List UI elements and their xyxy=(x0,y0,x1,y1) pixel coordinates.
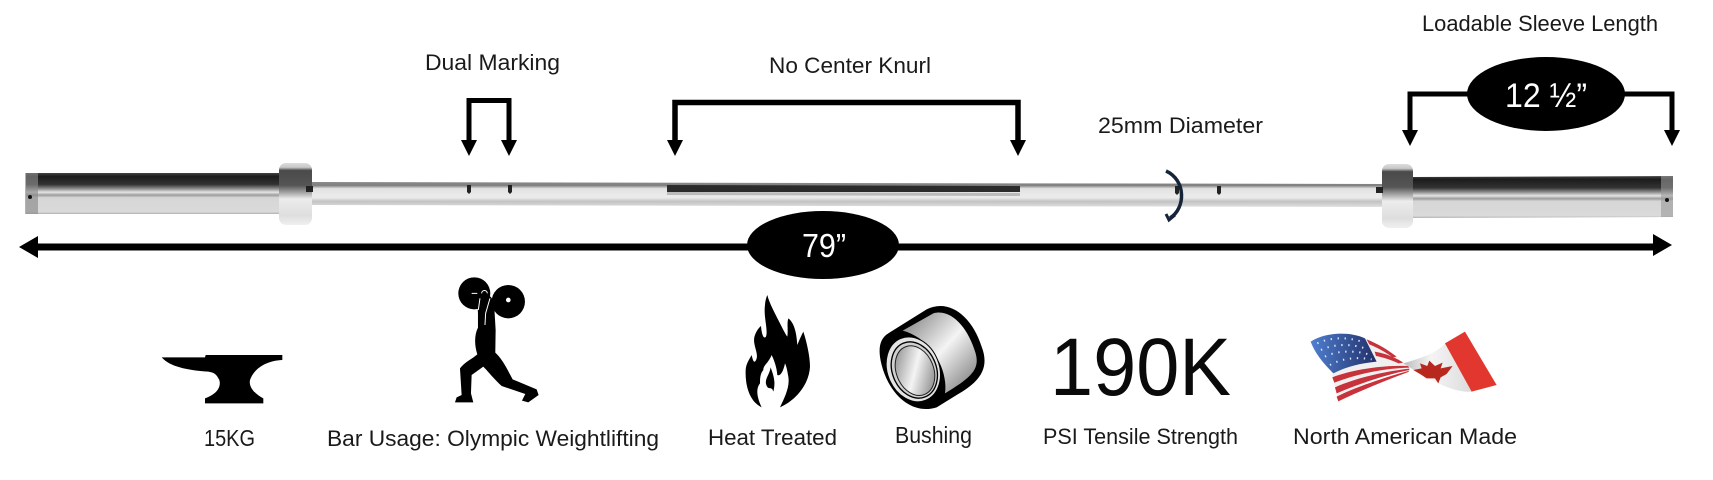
shaft xyxy=(312,182,1384,207)
label: north american made: North American Made xyxy=(1293,424,1517,449)
left collar xyxy=(279,163,313,225)
label: no center knurl: No Center Knurl xyxy=(769,53,931,78)
total length arrow xyxy=(19,234,1672,258)
bracket: dual marking xyxy=(461,100,517,156)
us canton xyxy=(1311,334,1377,373)
bar knurl marks xyxy=(467,185,1221,195)
maple leaf xyxy=(1413,361,1453,383)
bracket: no center knurl xyxy=(667,102,1026,156)
us flag stripes background xyxy=(1332,338,1410,401)
sleeve length badge: 12 ½” xyxy=(1505,77,1587,115)
icon: weightlifter xyxy=(455,277,539,402)
label: dual marking: Dual Marking xyxy=(425,50,560,75)
sleeve length badge xyxy=(1467,57,1625,131)
right collar xyxy=(1376,164,1413,228)
rotation arrow: 25mm diameter xyxy=(1166,171,1182,220)
bracket: sleeve length xyxy=(1402,94,1680,146)
icon: anvil xyxy=(162,355,282,403)
tensile strength number: 190K xyxy=(1050,322,1231,413)
icon: flame xyxy=(746,295,810,407)
label: 25mm diameter: 25mm Diameter xyxy=(1098,113,1263,138)
canada white band xyxy=(1403,343,1472,392)
length badge: 79” xyxy=(802,227,846,264)
stars xyxy=(1317,338,1372,365)
label: loadable sleeve length: Loadable Sleeve Length xyxy=(1422,11,1658,36)
canada red band xyxy=(1445,332,1497,392)
label: weight: 15KG xyxy=(204,425,255,451)
smooth center section xyxy=(667,185,1020,196)
icon: bushing xyxy=(877,306,985,410)
us red stripes xyxy=(1332,339,1409,401)
icon: us and canada flags xyxy=(1311,332,1497,401)
label: tensile strength: PSI Tensile Strength xyxy=(1043,424,1238,449)
left sleeve xyxy=(25,173,279,214)
right sleeve xyxy=(1412,176,1673,218)
label: bushing: Bushing xyxy=(895,422,972,448)
label: heat treated: Heat Treated xyxy=(708,425,837,450)
length badge xyxy=(747,211,899,279)
label: bar usage: Bar Usage: Olympic Weightlifting xyxy=(327,426,659,451)
barbell xyxy=(25,163,1673,228)
